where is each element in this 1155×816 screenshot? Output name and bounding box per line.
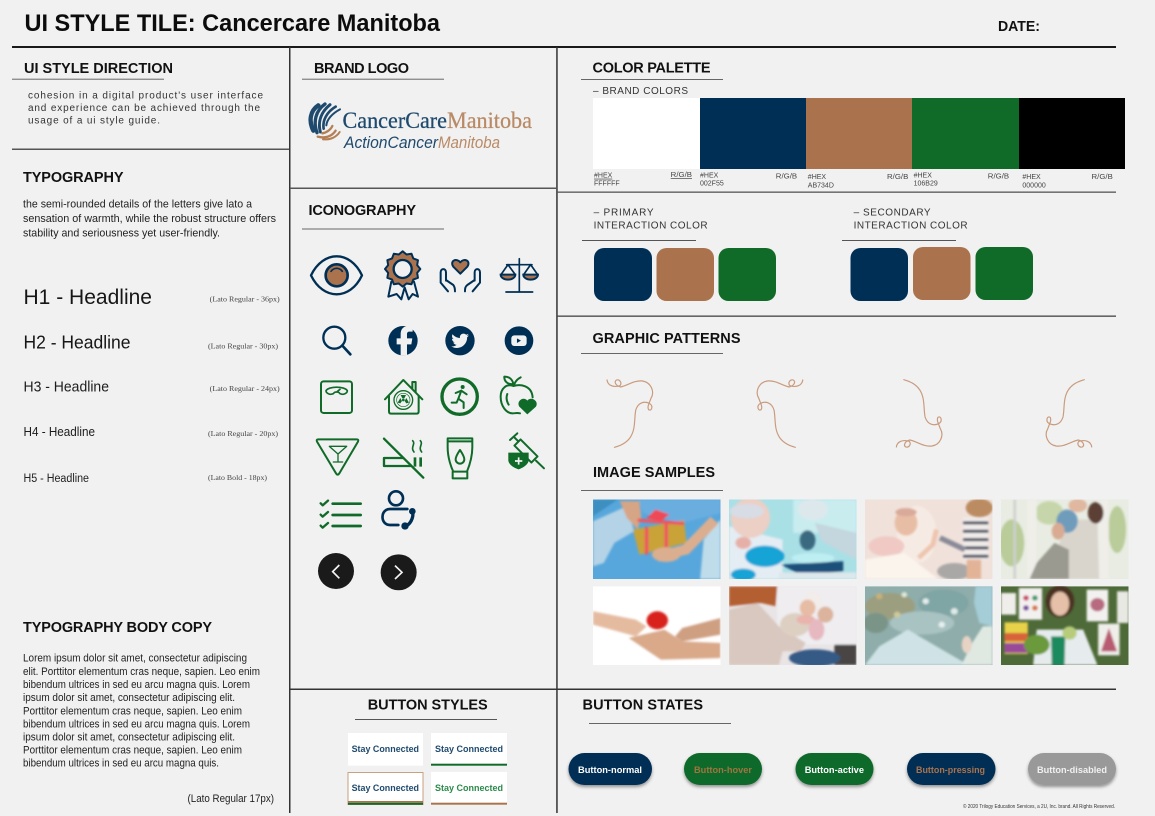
h2 sample: (Lato Regular - 30px) (208, 342, 279, 351)
icon: award rosette (385, 251, 420, 299)
swatch: black (1019, 98, 1125, 189)
secondary label (854, 208, 968, 231)
date label: DATE: (998, 19, 1040, 35)
typography description: the semi-rounded details of the letters give lato a (23, 198, 253, 210)
button style: plain (348, 733, 423, 766)
heading: TYPOGRAPHY BODY COPY (23, 620, 212, 636)
panel: button styles (348, 697, 507, 805)
icon: radon house (385, 380, 422, 414)
copyright footer: © 2020 Trilogy Education Services, a 2U, Inc. brand. All Rights Reserved. (963, 803, 1115, 810)
button style: green text (431, 772, 507, 805)
heading: BRAND LOGO (314, 61, 409, 77)
arrow: next (381, 554, 417, 590)
body copy sample: bibendum ultrices in sed eu arcu magna quis. Lorem (23, 679, 250, 691)
secondary label: – SECONDARY (854, 208, 931, 219)
panel: typography body copy (23, 620, 274, 805)
body copy sample: Lorem ipsum dolor sit amet, consectetur adipiscing (23, 653, 247, 665)
button: hover: Button-hover (694, 765, 752, 776)
icon: vaccine syringe and shield (508, 433, 544, 469)
icon: no smoking (384, 439, 423, 478)
panel: ui style direction (12, 61, 263, 126)
button: pressing (907, 753, 996, 785)
heading: BUTTON STATES (582, 697, 703, 713)
heading: ICONOGRAPHY (308, 203, 416, 219)
arrow: previous (318, 553, 354, 589)
h5 sample: (Lato Bold - 18px) (208, 473, 268, 482)
icon: search (323, 327, 350, 354)
h4 sample: H4 - Headline (24, 425, 95, 439)
heading: TYPOGRAPHY (23, 170, 124, 186)
swatch: navy: #HEX (700, 173, 719, 180)
typography description: stability and seriousness yet user-friendly. (23, 228, 220, 240)
h3 sample (24, 379, 280, 395)
icon: caring hands with heart (441, 260, 480, 291)
button style: outlined: Stay Connected (352, 783, 419, 794)
logo wordmark: CancerCare (342, 108, 447, 133)
title: UI STYLE TILE: Cancercare Manitoba (24, 10, 441, 37)
image: patient high-five with child (865, 500, 992, 579)
icon: eye (311, 256, 362, 294)
button: active (796, 753, 874, 785)
image: family laughing on sofa (729, 586, 856, 665)
body copy sample: elit. Porttitor elementum cras neque, sapien. Leo enim (23, 666, 260, 678)
image: patient looking out of window (865, 586, 992, 665)
heading: BUTTON STYLES (368, 697, 488, 713)
h1 sample (24, 285, 280, 309)
direction text: and experience can be achieved through the (28, 103, 260, 114)
h2 sample (24, 332, 279, 352)
h1 sample: (Lato Regular - 36px) (210, 295, 280, 304)
icon: twitter (445, 326, 475, 355)
h3 sample: (Lato Regular - 24px) (210, 384, 280, 393)
secondary label: INTERACTION COLOR (854, 220, 968, 231)
heading: UI STYLE DIRECTION (24, 61, 173, 77)
icon: facebook (388, 326, 418, 355)
swatch: black: #HEX (1022, 174, 1041, 181)
button style: green underline (431, 733, 507, 766)
primary label (594, 208, 708, 231)
swatch: green: R/G/B (988, 173, 1009, 180)
body copy sample: bibendum ultrices in sed eu arcu magna quis. Lorem (23, 718, 250, 730)
h4 sample: (Lato Regular - 20px) (208, 429, 279, 438)
swatch: navy: R/G/B (776, 173, 797, 180)
body copy sample (23, 653, 260, 770)
swatch: black: R/G/B (1092, 174, 1113, 181)
button: active: Button-active (805, 765, 864, 776)
swatch: green: 106B29 (914, 181, 938, 188)
pattern 3 (896, 380, 942, 447)
swatch: brown: AB734D (808, 182, 834, 189)
image: lab scientist with microscope (729, 500, 856, 579)
button: hover (684, 753, 762, 785)
swatch: green (912, 98, 1019, 188)
primary label: INTERACTION COLOR (594, 220, 708, 231)
h1 sample: H1 - Headline (24, 285, 152, 309)
button: pressing: Button-pressing (916, 765, 985, 776)
icon: alcohol warning triangle (317, 439, 358, 475)
secondary swatches (850, 247, 1033, 301)
direction text: usage of a ui style guide. (28, 115, 160, 126)
button style: green underline: Stay Connected (435, 744, 503, 755)
pattern 2 (757, 380, 803, 447)
panel: typography (23, 170, 280, 485)
button: normal (568, 753, 652, 785)
logo secondary wordmark: ActionCancer (343, 133, 439, 152)
panel: graphic patterns (581, 331, 1092, 447)
typography description (23, 198, 276, 240)
swatch: navy: 002F55 (700, 181, 724, 188)
icon: runner in circle (442, 379, 477, 414)
logo (311, 104, 532, 152)
body copy sample: ipsum dolor sit amet, consectetur adipiscing elit. (23, 692, 235, 704)
swatch: white: #HEX (594, 173, 613, 180)
direction text (28, 90, 263, 126)
direction text: cohesion in a digital product's user interface (28, 90, 263, 101)
icon: scales of justice (501, 259, 538, 292)
heading: COLOR PALETTE (592, 61, 711, 77)
swatch: navy (700, 98, 806, 188)
pattern 1 (607, 380, 653, 447)
panel: image samples (581, 465, 1128, 667)
panel: brand logo (302, 61, 532, 152)
button style: outlined (348, 772, 423, 805)
swatch: white: R/G/B (671, 172, 692, 179)
button style: green text: Stay Connected (435, 783, 503, 794)
button: normal: Button-normal (578, 765, 642, 776)
body copy sample: ipsum dolor sit amet, consectetur adipiscing elit. (23, 731, 235, 743)
swatch: brown (806, 98, 912, 189)
swatch: brown: #HEX (808, 174, 826, 181)
heading: GRAPHIC PATTERNS (592, 331, 741, 347)
panel: secondary interaction color (842, 208, 1033, 301)
heading: IMAGE SAMPLES (593, 465, 715, 481)
h2 sample: H2 - Headline (24, 332, 130, 352)
button style: plain: Stay Connected (352, 744, 419, 755)
logo wordmark region: Manitoba (447, 108, 532, 133)
image: hands holding heart (593, 586, 720, 665)
image: nutritionist with salad (1001, 586, 1128, 665)
swatch: green: #HEX (914, 173, 932, 180)
body copy sample: Porttitor elementum cras neque, sapien. Leo enim (23, 705, 242, 717)
swatch: white (593, 98, 700, 188)
button: disabled (1028, 753, 1116, 785)
body copy sample: Porttitor elementum cras neque, sapien. Leo enim (23, 745, 242, 757)
panel: primary interaction color (582, 208, 776, 301)
body copy sample: bibendum ultrices in sed eu arcu magna quis. (23, 758, 219, 770)
font note: (Lato Regular 17px) (188, 793, 274, 805)
primary swatches (594, 248, 776, 301)
image: patient holding gift (593, 500, 720, 579)
icon: sunscreen tube (448, 438, 472, 478)
swatch: brown: R/G/B (887, 174, 909, 181)
icon: person with phone (382, 491, 416, 530)
h3 sample: H3 - Headline (24, 379, 109, 395)
h5 sample (24, 473, 268, 485)
icon: weight scale (321, 381, 352, 413)
swatch: white: FFFFFF (594, 181, 620, 188)
primary label: – PRIMARY (594, 208, 654, 219)
h4 sample (24, 425, 279, 439)
icon: checklist (321, 501, 361, 528)
logo swirl (311, 104, 340, 139)
button: disabled: Button-disabled (1037, 765, 1107, 776)
icon: youtube (505, 326, 533, 355)
logo secondary region: Manitoba (438, 133, 500, 152)
panel: iconography (302, 203, 544, 590)
swatch: black: 000000 (1022, 182, 1046, 189)
panel: color palette (581, 61, 1125, 189)
brand colors label: – BRAND COLORS (593, 86, 688, 97)
image: mother embracing patient by window (1001, 500, 1128, 579)
typography description: sensation of warmth, while the robust structure offers (23, 213, 276, 225)
panel: button states (568, 697, 1116, 810)
icon: apple with heart (501, 377, 537, 414)
h5 sample: H5 - Headline (24, 473, 89, 485)
pattern 4 (1046, 380, 1092, 447)
